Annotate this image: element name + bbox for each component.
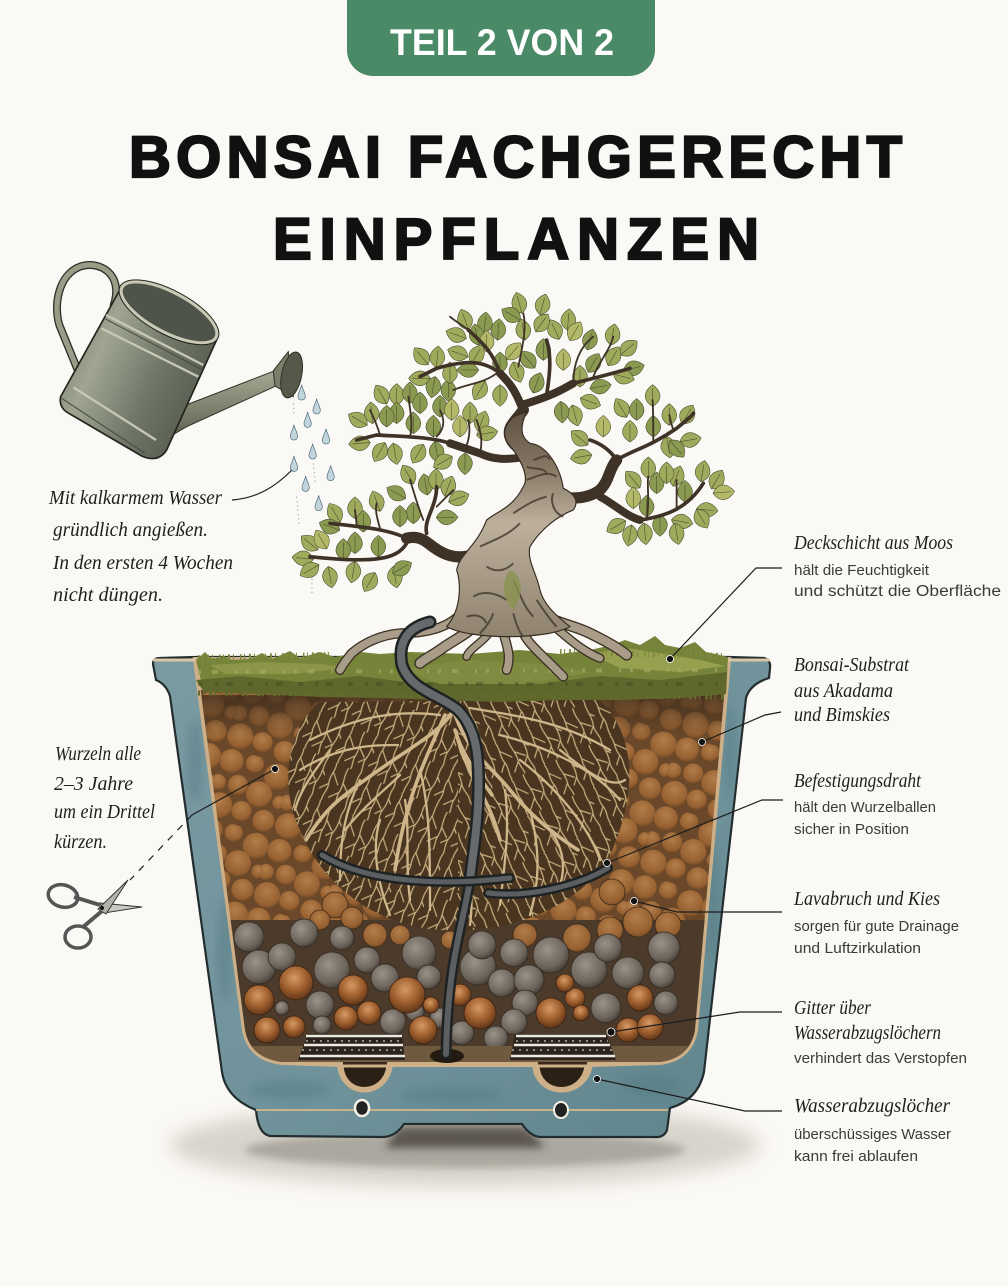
header tab: [347, 0, 655, 76]
moss texture: [198, 652, 726, 697]
callout: befestigungsdraht: [604, 770, 936, 866]
callout: gitter: [607, 997, 967, 1067]
ground shadow: [170, 1103, 760, 1187]
callout: lavabruch und kies: und Luftzirkulation: [794, 941, 921, 957]
can handle: [57, 265, 116, 372]
icon: scissors: [46, 880, 142, 948]
callout: watering note: Mit kalkarmem Wasser: [48, 487, 222, 509]
drain holes: [342, 1049, 586, 1118]
bonsai tree: [291, 290, 735, 677]
callout: bonsai-substrat: [698, 654, 909, 746]
callout: lavabruch und kies: [630, 888, 959, 957]
callout: bonsai-substrat: Bonsai-Substrat: [794, 654, 909, 676]
surface roots: [340, 607, 627, 677]
pot wall light rim: [153, 658, 770, 662]
cavity floor: [252, 1046, 689, 1062]
can bands: [73, 315, 203, 440]
mesh grids: [298, 1034, 616, 1060]
branches: [310, 313, 703, 560]
can spout: [156, 371, 276, 443]
title: EINPFLANZEN: [273, 207, 759, 272]
callout: lavabruch und kies: sorgen für gute Drainage: [794, 919, 959, 935]
callout: befestigungsdraht: Befestigungsdraht: [794, 770, 921, 792]
callout: wasserabzugslöcher: Wasserabzugslöcher: [794, 1095, 950, 1117]
callout: wasserabzugslöcher: kann frei ablaufen: [794, 1149, 918, 1165]
callout: bonsai-substrat: und Bimskies: [794, 704, 890, 726]
pot cavity: [196, 660, 728, 1090]
lava and gravel layer: [230, 878, 705, 1062]
callout: lavabruch und kies: Lavabruch und Kies: [793, 888, 940, 910]
callout: bonsai-substrat: aus Akadama: [794, 680, 893, 702]
root ball: [288, 700, 630, 930]
callout: befestigungsdraht: sicher in Position: [794, 822, 909, 838]
substrate layer: [190, 690, 740, 1064]
callout: gitter: Wasserabzugslöchern: [794, 1022, 941, 1044]
callout: wasserabzugslöcher: [594, 1076, 951, 1165]
water drops: [290, 385, 334, 595]
can opening: [113, 270, 225, 355]
foliage: [291, 290, 735, 595]
trunk moss: [504, 570, 521, 610]
callout: root pruning note: [54, 743, 278, 880]
title: BONSAI FACHGERECHT: [129, 125, 902, 190]
pot mottling: [187, 705, 736, 1103]
callout: befestigungsdraht: hält den Wurzelballen: [794, 800, 936, 816]
callout: deckschicht aus moos: Deckschicht aus Moos: [793, 532, 953, 554]
bark details: [467, 456, 563, 637]
title: [129, 125, 902, 272]
callout: gitter: verhindert das Verstopfen: [794, 1051, 967, 1067]
callout: gitter: Gitter über: [794, 997, 871, 1019]
callout: deckschicht aus moos: hält die Feuchtigkeit: [794, 563, 929, 579]
can rose head: [273, 352, 293, 397]
pot body: [153, 657, 770, 1137]
fixing wire: [322, 622, 608, 1054]
callout: root pruning note: Wurzeln alle: [55, 743, 141, 765]
can body: [60, 288, 217, 459]
callout: root pruning note: um ein Drittel: [54, 801, 155, 823]
pot base band: [256, 1109, 668, 1111]
moss layer: [196, 636, 728, 702]
watering can: [57, 265, 334, 595]
callout: deckschicht aus moos: [666, 532, 1001, 662]
callout: root pruning note: kürzen.: [54, 831, 107, 853]
callout: wasserabzugslöcher: überschüssiges Wasser: [794, 1127, 951, 1143]
callout: watering note: In den ersten 4 Wochen: [52, 552, 233, 574]
trunk: [447, 412, 576, 637]
callout: watering note: gründlich angießen.: [53, 519, 208, 541]
header tab: TEIL 2 VON 2: [390, 22, 614, 63]
pot: [153, 657, 770, 1137]
callout: root pruning note: 2–3 Jahre: [54, 773, 133, 795]
callout: watering note: nicht düngen.: [53, 584, 163, 606]
callout: deckschicht aus moos: und schützt die Oberfläche: [794, 583, 1001, 600]
callout: watering note: [48, 470, 292, 606]
